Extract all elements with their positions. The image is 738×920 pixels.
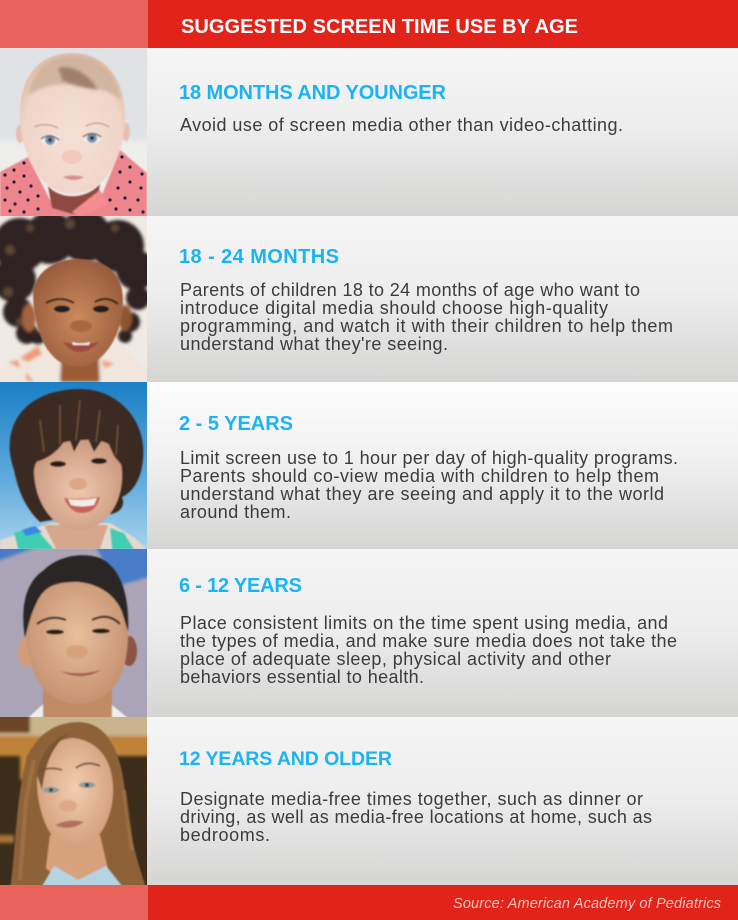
text: 2 to 5 years: Parents should co-view media with children to help them xyxy=(180,466,659,486)
panel: 6 to 12 years xyxy=(147,549,738,717)
heading: 6 to 12 years: 6 - 12 YEARS xyxy=(179,575,302,597)
text: 18 to 24 months: understand what they're seeing. xyxy=(180,334,448,354)
text: 18 to 24 months: introduce digital media should choose high-quality xyxy=(180,298,608,318)
text: 6 to 12 years xyxy=(180,613,677,687)
photo: young child on blue sky xyxy=(0,382,147,549)
photo: toddler with curly hair xyxy=(0,210,156,382)
heading: 18 months and younger: 18 MONTHS AND YOUNGER xyxy=(179,82,447,104)
text: 18 months and younger: Avoid use of screen media other than video-chatting. xyxy=(180,115,623,135)
text: 12 years and older: driving, as well as media-free locations at home, such as xyxy=(180,807,652,827)
text: 6 to 12 years: the types of media, and make sure media does not take the xyxy=(180,631,677,651)
title: SUGGESTED SCREEN TIME USE BY AGE xyxy=(181,16,578,38)
text: 18 to 24 months xyxy=(180,280,673,354)
heading: 2 to 5 years: 2 - 5 YEARS xyxy=(179,413,293,435)
header bar xyxy=(0,0,738,48)
photo: baby xyxy=(0,48,157,220)
text: 2 to 5 years: Limit screen use to 1 hour per day of high-quality programs. xyxy=(180,448,678,468)
text: 2 to 5 years: around them. xyxy=(180,502,291,522)
text: 12 years and older xyxy=(180,789,652,845)
text: 18 to 24 months: programming, and watch it with their children to help them xyxy=(180,316,673,336)
text: 6 to 12 years: Place consistent limits on the time spent using media, and xyxy=(180,613,668,633)
source credit: Source: American Academy of Pediatrics xyxy=(453,896,721,912)
text: 12 years and older: Designate media-free times together, such as dinner or xyxy=(180,789,643,809)
footer bar xyxy=(0,885,738,920)
text: 6 to 12 years: place of adequate sleep, physical activity and other xyxy=(180,649,611,669)
panel: 12 years and older xyxy=(147,717,738,885)
text: 12 years and older: bedrooms. xyxy=(180,825,270,845)
text: 6 to 12 years: behaviors essential to health. xyxy=(180,667,424,687)
heading: 12 years and older: 12 YEARS AND OLDER xyxy=(179,748,392,770)
panel: 2 to 5 years xyxy=(147,382,738,549)
photo: teenage girl xyxy=(0,717,147,885)
panel: 18 months and younger xyxy=(147,48,738,216)
photo: boy xyxy=(0,545,152,718)
heading: 18 to 24 months: 18 - 24 MONTHS xyxy=(179,246,339,268)
text: 18 to 24 months: Parents of children 18 to 24 months of age who want to xyxy=(180,280,640,300)
panel: 18 to 24 months xyxy=(147,216,738,382)
text: 2 to 5 years xyxy=(180,448,678,522)
text: 2 to 5 years: understand what they are seeing and apply it to the world xyxy=(180,484,664,504)
